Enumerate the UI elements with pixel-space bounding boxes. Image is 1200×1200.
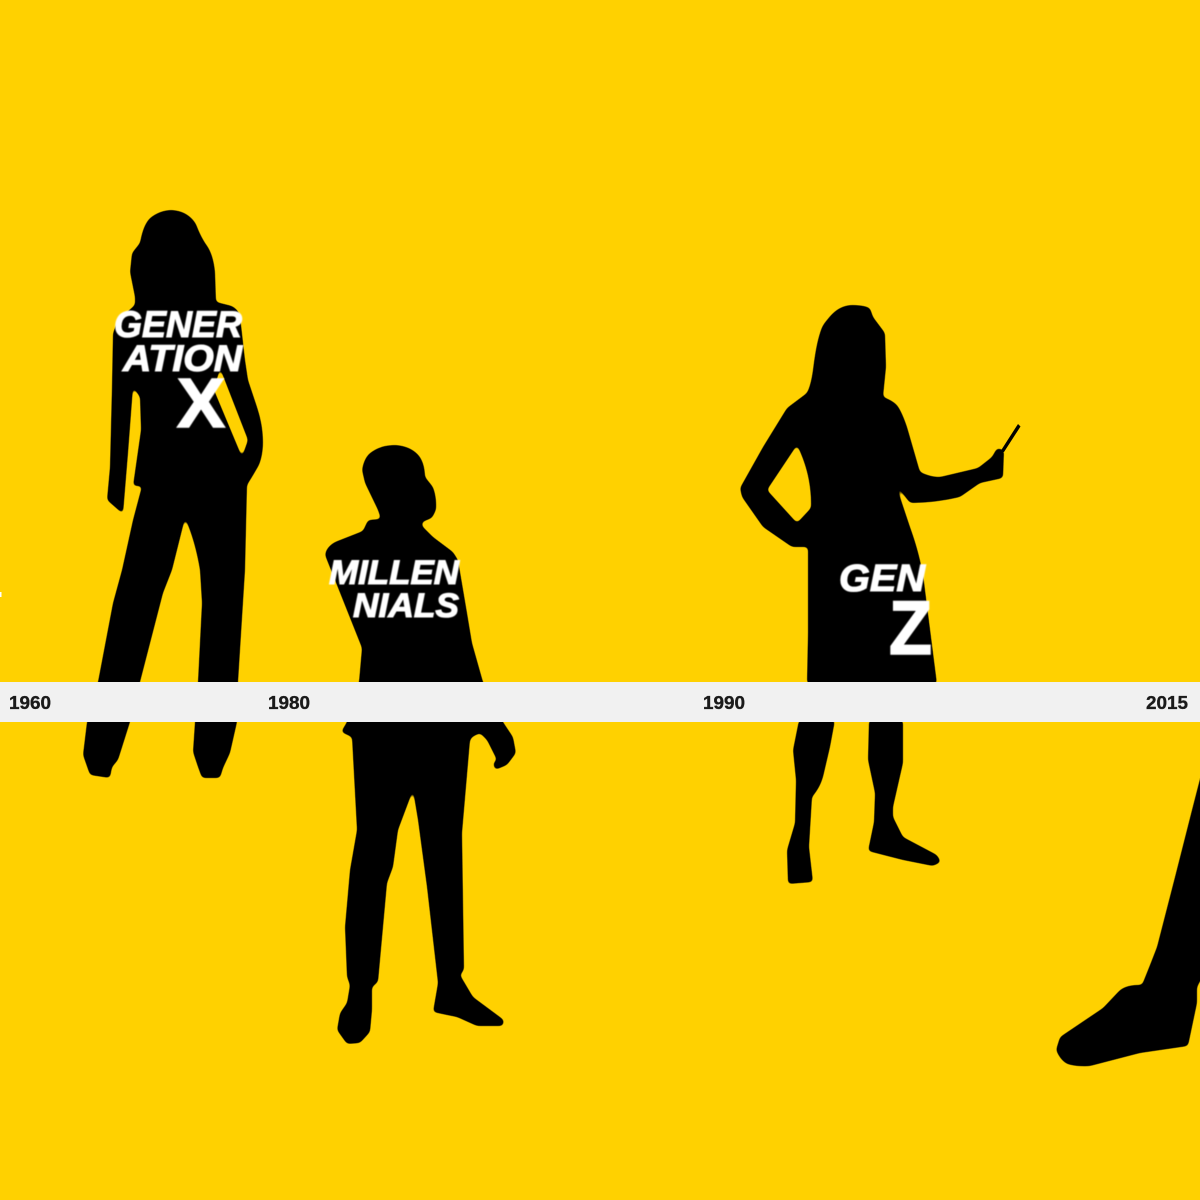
cropped label fragment at left edge [0, 592, 2, 597]
icon: pointer held by Gen Z woman [1000, 424, 1020, 452]
label: Generation X: X [177, 364, 225, 442]
year label 1990: 1990 [703, 693, 745, 713]
label: Generation X: ATION [122, 338, 243, 379]
label: Millennials: MILLEN [329, 554, 460, 592]
label: Gen Z: Z [889, 586, 932, 671]
label: Millennials [329, 554, 460, 625]
year label 2015: 2015 [1146, 693, 1188, 713]
year label 1960: 1960 [9, 693, 51, 713]
timeline band [0, 682, 1200, 722]
silhouette: Gen Z woman legs [787, 720, 941, 884]
label: Millennials: NIALS [353, 587, 459, 625]
silhouette: Gen Z woman pointing [740, 305, 1004, 684]
label: Gen Z: GEN [839, 558, 927, 600]
label: Gen Z [839, 558, 932, 671]
year label 1980: 1980 [268, 693, 310, 713]
silhouette: Generation X woman [83, 210, 263, 778]
silhouette: cropped foot of next figure [1056, 740, 1200, 1066]
silhouette: Millennial man [325, 445, 516, 1044]
label: Generation X: GENER [114, 304, 242, 345]
label: Generation X [114, 304, 243, 442]
